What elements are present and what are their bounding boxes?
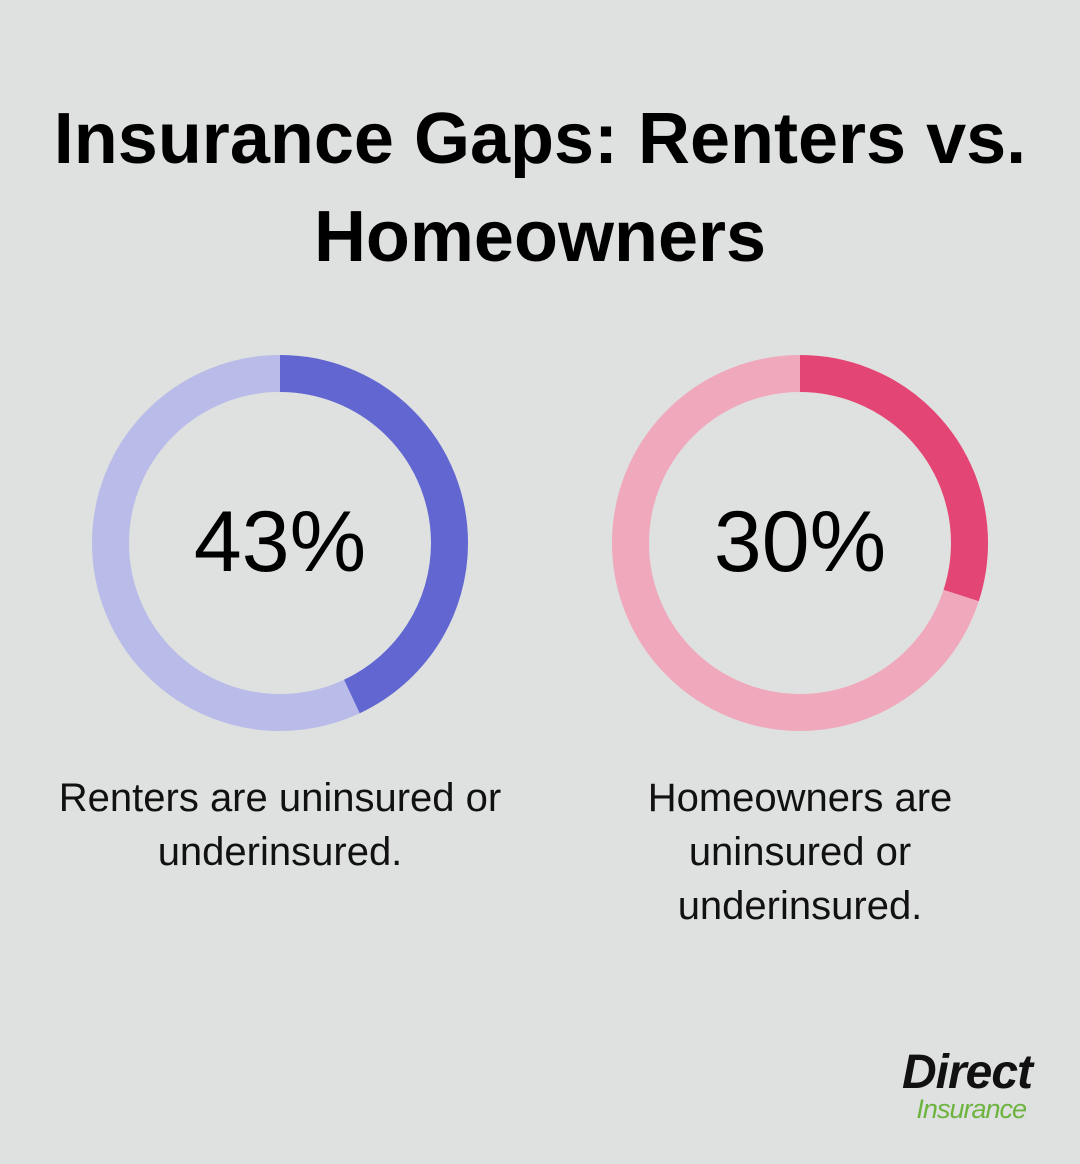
label: homeowners: Homeowners are: [648, 776, 952, 820]
logo: [902, 1046, 1035, 1124]
label: renters: underinsured.: [158, 830, 402, 874]
label: renters: [59, 776, 501, 874]
title: Insurance Gaps: Renters vs.: [54, 99, 1026, 179]
chart: homeowners donut: 30%: [714, 494, 886, 590]
label: homeowners: uninsured or: [689, 830, 911, 874]
logo: Insurance: [916, 1094, 1026, 1124]
chart: homeowners donut: [612, 355, 988, 731]
title: [54, 99, 1026, 277]
label: homeowners: underinsured.: [678, 884, 922, 928]
logo: Direct: [902, 1046, 1032, 1099]
chart: renters donut: [92, 355, 468, 731]
chart: renters donut: 43%: [194, 494, 366, 590]
label: homeowners: [648, 776, 952, 928]
title: Homeowners: [314, 197, 766, 277]
label: renters: Renters are uninsured or: [59, 776, 501, 820]
